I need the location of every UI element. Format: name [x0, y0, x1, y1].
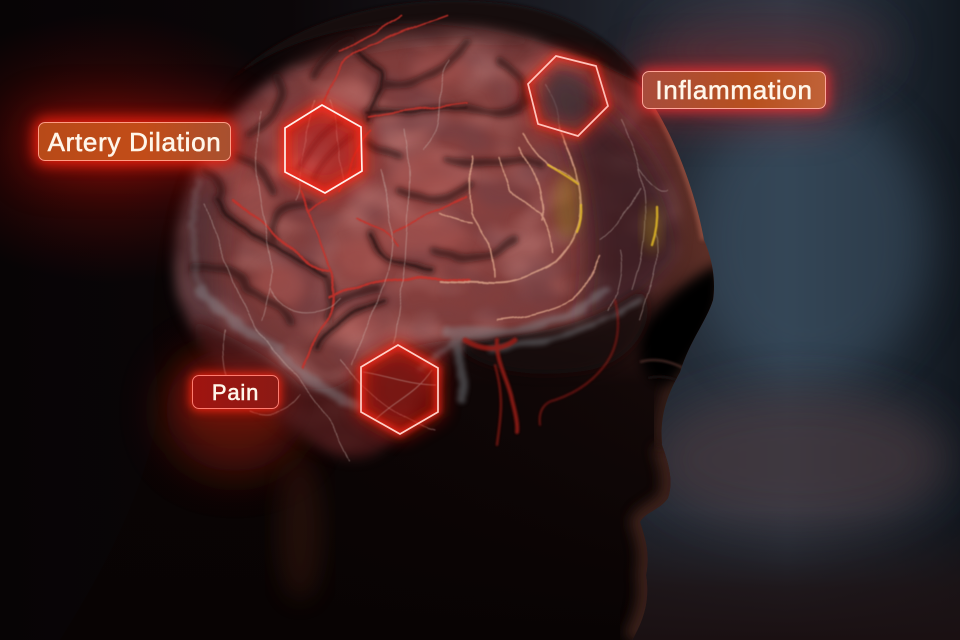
brain base: [168, 20, 682, 464]
lower temporal shade: [195, 320, 470, 470]
label: Pain: [192, 375, 279, 409]
hexagon: pain: [361, 345, 438, 434]
label: Artery Dilation: Artery Dilation: [48, 127, 221, 157]
label: Inflammation: Inflammation: [655, 75, 813, 105]
sulci dark folds: [193, 40, 540, 347]
label: Pain: Pain: [212, 380, 259, 405]
hexagon: artery dilation: [285, 105, 362, 193]
head silhouette: [143, 0, 714, 640]
grey nerve bands: [193, 180, 640, 405]
yellow glow vessels: [554, 171, 582, 239]
eye socket shadow: [640, 262, 722, 385]
hexagon: inflammation: [528, 56, 608, 136]
dark frontal lobe shade: [535, 75, 685, 330]
face rim light: [632, 100, 722, 640]
red glow behind the ear: [165, 348, 305, 472]
pale arterial branches: [440, 130, 600, 320]
vessels below the brain: [465, 300, 618, 445]
label: Artery Dilation: [38, 122, 231, 161]
arteries: [233, 15, 470, 367]
label: Inflammation: [642, 71, 826, 109]
red halo over the back of the head: [0, 13, 310, 283]
hair: [220, 0, 650, 90]
pale fibres: [205, 60, 668, 462]
brain: [168, 14, 682, 464]
gyri highlights: [226, 54, 470, 339]
